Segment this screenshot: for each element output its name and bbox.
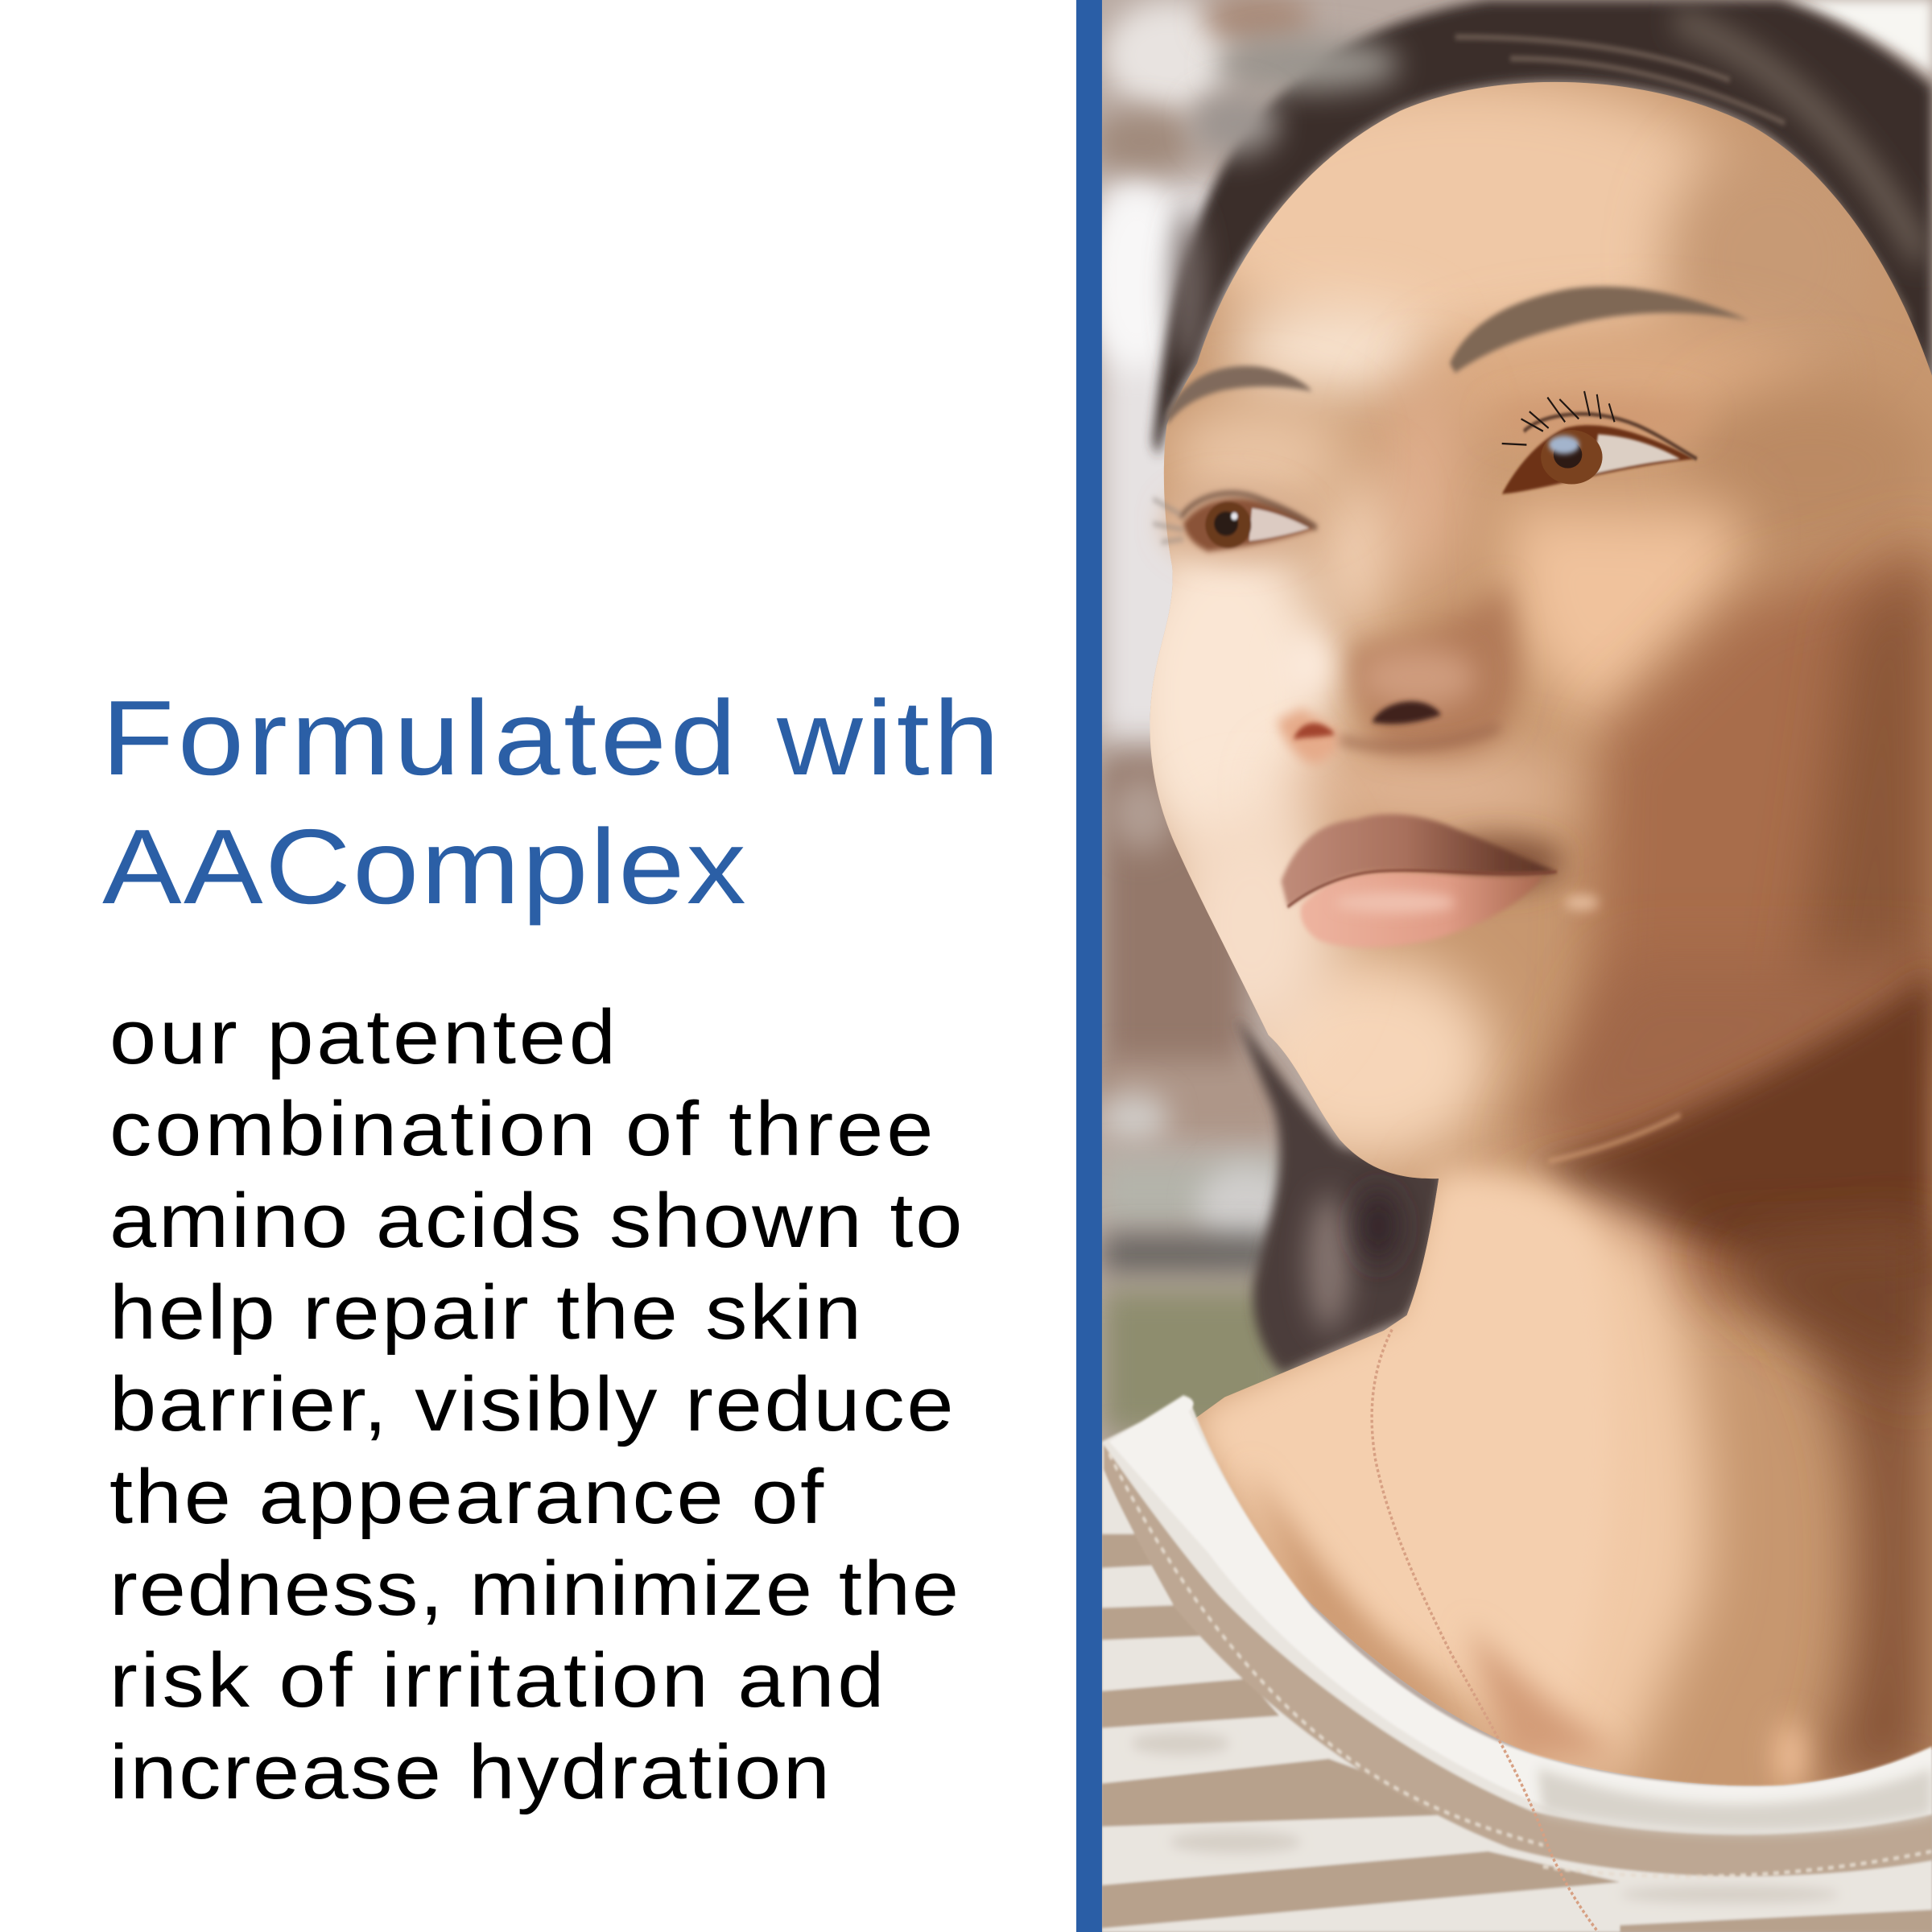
body text block: barrier, visibly reduce — [109, 1361, 954, 1447]
heading: Formulated with AAComplex: Formulated with — [101, 678, 1000, 797]
body text block: combination of three — [109, 1086, 934, 1172]
blurred outdoor background — [1087, 0, 1932, 1932]
body text block — [109, 994, 962, 1815]
left eye — [1153, 487, 1317, 560]
white text panel background — [0, 0, 1076, 1932]
body text block: our patented — [109, 994, 616, 1080]
right collar grey shading — [1538, 1768, 1932, 1832]
striped shirt — [1102, 1395, 1932, 1932]
blue vertical divider bar — [1076, 0, 1103, 1932]
shirt stitching — [1109, 1454, 1932, 1876]
body text block: amino acids shown to — [109, 1178, 962, 1264]
body text block: risk of irritation and — [109, 1637, 884, 1724]
right eyebrow — [1450, 287, 1749, 373]
body text block: the appearance of — [109, 1454, 824, 1540]
hair behind neck — [1236, 1017, 1444, 1374]
body text block: help repair the skin — [109, 1269, 861, 1356]
left eyebrow — [1166, 366, 1312, 425]
necklace chain — [1372, 1330, 1598, 1932]
collar white band — [1109, 1395, 1932, 1832]
body text block: increase hydration — [109, 1729, 830, 1815]
collar tan rib — [1104, 1445, 1932, 1876]
shadow under jaw on the neck — [1520, 968, 1932, 1286]
heading: Formulated with AAComplex: AAComplex — [102, 807, 746, 926]
mottled shirt texture — [1131, 1732, 1839, 1903]
skin: face and neck — [1150, 82, 1932, 1786]
lit neck — [1180, 1176, 1708, 1786]
right eye — [1488, 391, 1708, 494]
jaw line highlight — [1549, 1115, 1680, 1162]
heading: Formulated with AAComplex — [101, 678, 1000, 926]
lips — [1281, 814, 1599, 947]
body text block: redness, minimize the — [109, 1546, 959, 1632]
collarbone shade — [1246, 1466, 1488, 1744]
hair on top of head — [1153, 0, 1932, 456]
photo: woman looking to the side — [1087, 0, 1932, 1932]
neck shadow right — [1769, 1291, 1932, 1781]
shirt stripes — [1102, 1534, 1932, 1932]
nose — [1277, 585, 1518, 764]
